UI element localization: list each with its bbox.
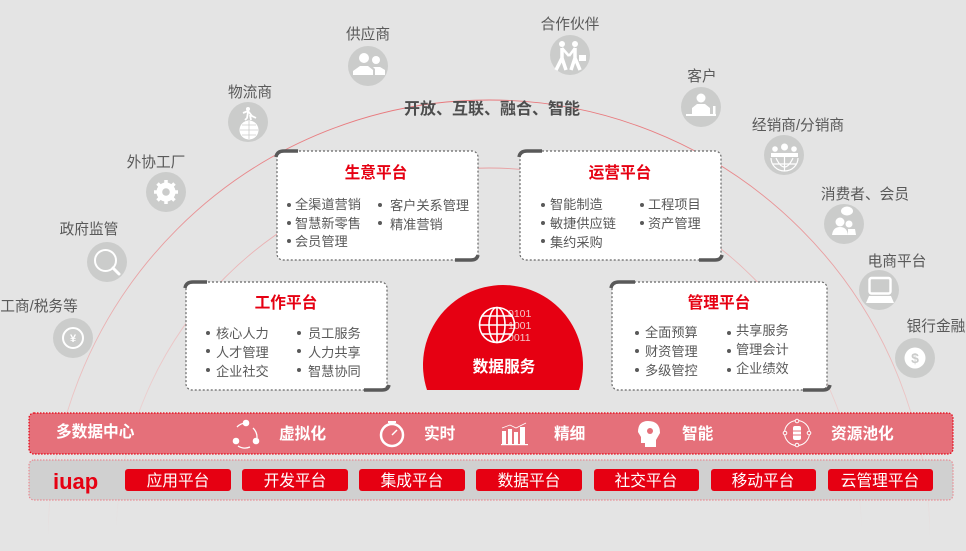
panel: 运营平台 bbox=[519, 151, 722, 260]
partner: 供应商 bbox=[346, 25, 390, 86]
list: 管理平台 items: 财资管理 bbox=[645, 344, 698, 359]
heading: 运营平台: 运营平台 bbox=[589, 163, 651, 182]
heading: open, connected, integrated, intelligent: 开放、互联、融合、智能 bbox=[404, 99, 580, 118]
outer arc bbox=[48, 100, 930, 541]
heading: 生意平台: 生意平台 bbox=[345, 163, 407, 182]
button: 开发平台 bbox=[242, 469, 348, 491]
partner: 工商/税务等: 工商/税务等 bbox=[0, 297, 78, 315]
partner: 合作伙伴 bbox=[541, 16, 600, 75]
partner: 银行金融: $ bbox=[911, 350, 919, 366]
button: 集成平台: 集成平台 bbox=[381, 472, 443, 490]
list: 运营平台 items: 工程项目 bbox=[648, 197, 701, 212]
icon: globe bbox=[480, 308, 514, 342]
partner: 电商平台 bbox=[859, 253, 926, 310]
binary digits: 1001 bbox=[508, 320, 532, 332]
button: 云管理平台 bbox=[828, 469, 933, 491]
list: 管理平台 items: 企业绩效 bbox=[736, 360, 789, 376]
partner: 电商平台: 电商平台 bbox=[868, 253, 926, 270]
partner: 物流商 bbox=[228, 84, 272, 142]
button: 数据平台: 数据平台 bbox=[498, 472, 560, 490]
button: 社交平台: 社交平台 bbox=[615, 472, 677, 490]
list: 管理平台 items: 全面预算 bbox=[645, 324, 698, 340]
partner: 消费者、会员 bbox=[821, 186, 909, 244]
heading: 管理平台: 管理平台 bbox=[688, 293, 750, 312]
button: 应用平台: 应用平台 bbox=[147, 471, 209, 490]
list: 运营平台 items: 敏捷供应链 bbox=[550, 216, 616, 231]
partner: 物流商: 物流商 bbox=[228, 84, 272, 101]
label: 数据服务: 数据服务 bbox=[473, 357, 536, 376]
list: 运营平台 items: 智能制造 bbox=[550, 197, 603, 212]
partner: 供应商: 供应商 bbox=[346, 25, 390, 43]
list: 运营平台 items bbox=[541, 197, 701, 250]
button: 移动平台: 移动平台 bbox=[732, 472, 794, 490]
logo: iuap: iuap bbox=[53, 469, 98, 494]
list: 工作平台 items: 人力共享 bbox=[308, 344, 361, 360]
binary digits: 0011 bbox=[508, 332, 531, 344]
icon: 资源池化 bbox=[783, 419, 811, 447]
list: 工作平台 items: 智慧协同 bbox=[308, 364, 361, 379]
partner: 经销商/分销商 bbox=[752, 117, 844, 175]
panel: 生意平台 bbox=[276, 151, 478, 260]
band: 多数据中心 bbox=[29, 413, 953, 454]
list: 管理平台 items bbox=[635, 322, 789, 378]
band: 多数据中心: 多数据中心 bbox=[56, 422, 135, 441]
band: 多数据中心: 资源池化 bbox=[831, 424, 894, 443]
list: 生意平台 items: 全渠道营销 bbox=[295, 196, 361, 212]
icon: 智能 bbox=[638, 421, 660, 447]
binary digits: 0101 bbox=[508, 308, 532, 320]
panel: 管理平台 bbox=[611, 282, 830, 390]
button: 应用平台 bbox=[125, 469, 231, 491]
partner: 政府监管 bbox=[60, 221, 127, 282]
heading: 工作平台: 工作平台 bbox=[255, 293, 317, 312]
partner: 工商/税务等: ¥ bbox=[70, 333, 77, 345]
list: 运营平台 items: 集约采购 bbox=[550, 235, 603, 250]
icon: 实时 bbox=[381, 422, 403, 446]
button: 数据平台 bbox=[476, 469, 582, 491]
band: 多数据中心: 虚拟化 bbox=[279, 424, 326, 443]
list: 管理平台 items: 管理会计 bbox=[736, 342, 789, 357]
icon: 精细 bbox=[501, 423, 528, 445]
list: 工作平台 items: 人才管理 bbox=[216, 345, 269, 360]
partner: 银行金融 bbox=[895, 318, 966, 378]
list: 管理平台 items: 共享服务 bbox=[736, 322, 789, 338]
button: 云管理平台: 云管理平台 bbox=[841, 472, 919, 490]
list: 工作平台 items: 企业社交 bbox=[216, 363, 269, 379]
list: 生意平台 items: 客户关系管理 bbox=[390, 197, 469, 213]
list: 生意平台 items: 会员管理 bbox=[295, 234, 348, 249]
list: 工作平台 items: 核心人力 bbox=[216, 326, 269, 341]
band: 多数据中心: 实时 bbox=[424, 424, 456, 443]
icon: 虚拟化 bbox=[233, 420, 259, 448]
list: 生意平台 items: 精准营销 bbox=[390, 217, 443, 232]
binary digits bbox=[508, 308, 532, 344]
list: 管理平台 items: 多级管控 bbox=[645, 362, 698, 378]
panel: 工作平台 bbox=[185, 282, 389, 390]
band: iuap bbox=[29, 460, 953, 500]
inner arc bbox=[116, 168, 862, 541]
partner: 消费者、会员: 消费者、会员 bbox=[821, 186, 909, 203]
partner: 外协工厂: 外协工厂 bbox=[127, 154, 185, 171]
list: 工作平台 items: 员工服务 bbox=[308, 326, 361, 341]
partner: 客户: 客户 bbox=[687, 68, 717, 85]
button: 开发平台: 开发平台 bbox=[264, 472, 326, 490]
partner: 合作伙伴: 合作伙伴 bbox=[541, 16, 600, 33]
panel: 数据服务 bbox=[423, 285, 583, 390]
partner: 经销商/分销商: 经销商/分销商 bbox=[752, 117, 844, 134]
button: 社交平台 bbox=[594, 469, 699, 491]
partner: 银行金融: 银行金融 bbox=[907, 318, 966, 335]
list: 生意平台 items bbox=[287, 196, 469, 249]
list: 工作平台 items bbox=[206, 326, 361, 379]
partner: 工商/税务等 bbox=[0, 297, 93, 358]
list: 生意平台 items: 智慧新零售 bbox=[295, 216, 361, 231]
band: 多数据中心: 智能 bbox=[682, 424, 714, 443]
partner: 客户 bbox=[681, 68, 721, 127]
partner: 政府监管: 政府监管 bbox=[60, 221, 118, 238]
button: 移动平台 bbox=[711, 469, 816, 491]
band: 多数据中心: 精细 bbox=[554, 424, 585, 443]
list: 运营平台 items: 资产管理 bbox=[648, 216, 701, 231]
button: 集成平台 bbox=[359, 469, 465, 491]
partner: 外协工厂 bbox=[127, 154, 186, 212]
